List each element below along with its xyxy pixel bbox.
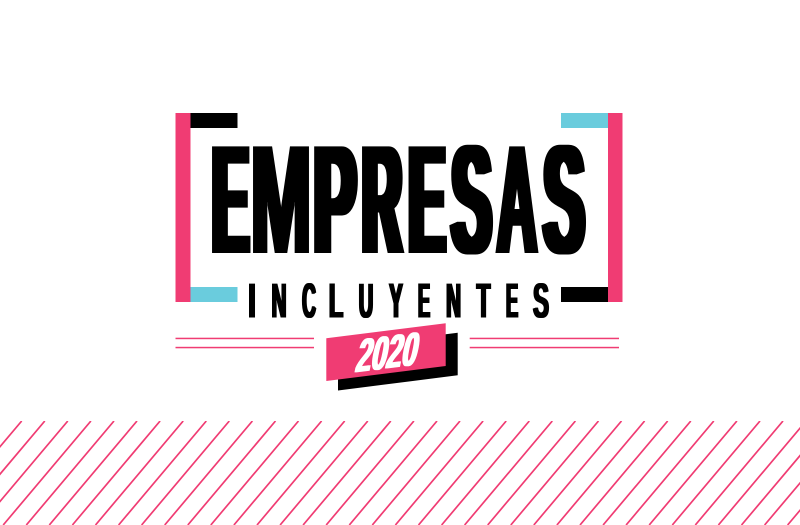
subtitle: INCLUYENTES: C xyxy=(302,273,316,328)
subtitle: INCLUYENTES: U xyxy=(359,273,373,328)
title: EMPRESAS: M xyxy=(251,112,311,286)
title: EMPRESAS: P xyxy=(314,114,356,287)
double rule: left xyxy=(176,338,314,348)
year: 2020: 2020 xyxy=(352,323,424,383)
subtitle: INCLUYENTES: E xyxy=(506,274,518,328)
diagonal stripe band xyxy=(0,421,800,525)
subtitle: INCLUYENTES: N xyxy=(272,273,286,328)
subtitle: INCLUYENTES: T xyxy=(477,274,490,329)
subtitle: INCLUYENTES: S xyxy=(533,274,549,329)
title: EMPRESAS: E xyxy=(212,113,249,286)
subtitle: INCLUYENTES: N xyxy=(446,273,461,328)
year badge xyxy=(326,323,458,390)
title: EMPRESAS: E xyxy=(409,113,445,286)
title: EMPRESAS xyxy=(212,112,584,287)
title: EMPRESAS: R xyxy=(362,113,402,286)
title: EMPRESAS: A xyxy=(497,113,537,286)
subtitle: INCLUYENTES: L xyxy=(329,274,343,329)
subtitle: INCLUYENTES: I xyxy=(248,274,256,329)
logo frame brackets xyxy=(176,113,622,302)
subtitle: INCLUYENTES: E xyxy=(418,274,430,328)
double rule: right xyxy=(470,338,619,348)
title: EMPRESAS: S xyxy=(452,113,491,286)
title: EMPRESAS: S xyxy=(544,112,584,286)
subtitle: INCLUYENTES: Y xyxy=(389,273,403,328)
subtitle: INCLUYENTES xyxy=(248,273,549,329)
